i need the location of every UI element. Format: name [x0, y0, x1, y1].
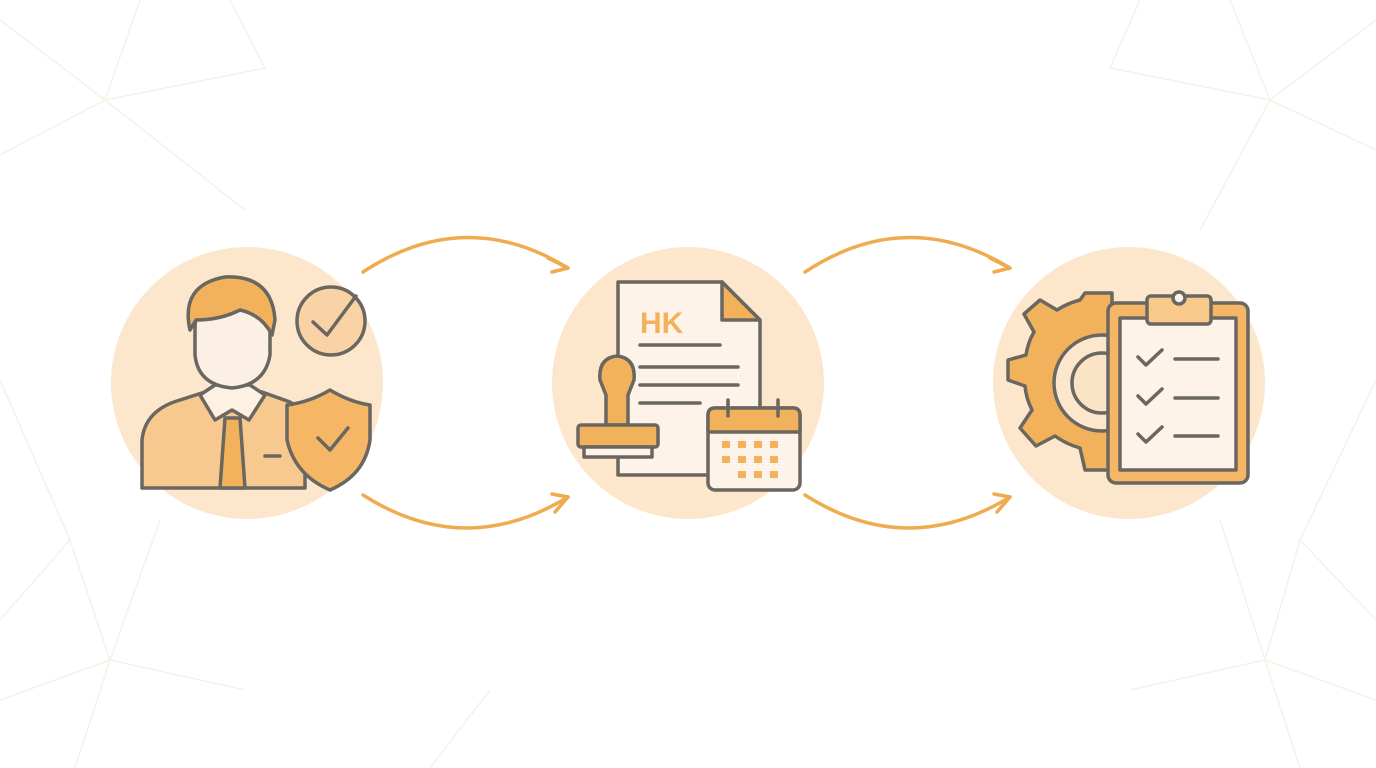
- arrows 1-2: [363, 237, 568, 528]
- step 3: gear and clipboard: [993, 247, 1265, 519]
- label: HK: HK: [640, 307, 684, 340]
- arrows 2-3: [805, 237, 1010, 528]
- step 2: document, stamp, calendar: [552, 247, 824, 519]
- step 1: person with checks: [111, 247, 383, 519]
